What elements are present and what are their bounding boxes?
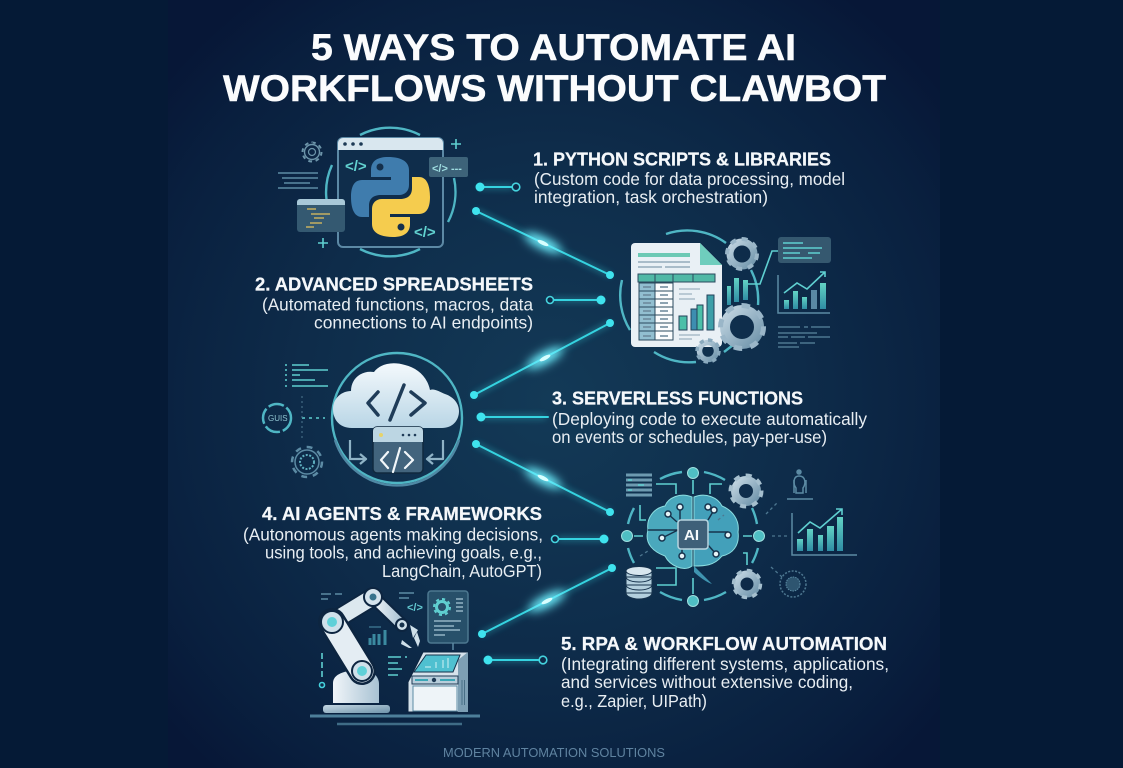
heading block 4: 4. AI AGENTS & FRAMEWORKS [262, 504, 542, 524]
icon: python window [278, 128, 468, 256]
icon: serverless cloud: GUIS [268, 414, 288, 423]
heading block 1 [533, 150, 845, 207]
heading block 1: integration, task orchestration) [534, 187, 768, 207]
heading block 5: 5. RPA & WORKFLOW AUTOMATION [561, 634, 887, 654]
heading block 5 [561, 634, 889, 711]
icon: serverless cloud [263, 353, 462, 485]
icon: AI brain [622, 468, 857, 606]
heading block 1: 1. PYTHON SCRIPTS & LIBRARIES [533, 150, 831, 170]
heading block 5: and services without extensive coding, [561, 672, 853, 692]
title [223, 27, 886, 109]
icon: python window: </> [345, 158, 367, 175]
icon: robot arm and kiosk [310, 588, 480, 724]
heading block 1: (Custom code for data processing, model [534, 169, 845, 189]
footer: MODERN AUTOMATION SOLUTIONS [443, 746, 665, 760]
heading block 2: (Automated functions, macros, data [262, 294, 533, 314]
icon: spreadsheet [620, 230, 831, 362]
heading block 3: on events or schedules, pay-per-use) [552, 427, 827, 447]
heading block 2: 2. ADVANCED SPREADSHEETS [255, 274, 533, 294]
heading block 3: 3. SERVERLESS FUNCTIONS [552, 388, 803, 408]
heading block 4: using tools, and achieving goals, e.g., [265, 542, 542, 562]
heading block 5: e.g., Zapier, UIPath) [561, 691, 707, 711]
heading block 4 [243, 504, 543, 581]
heading block 3: (Deploying code to execute automatically [552, 409, 867, 429]
heading block 5: (Integrating different systems, applications, [561, 654, 889, 674]
connectors [470, 182, 616, 664]
heading block 4: (Autonomous agents making decisions, [243, 524, 543, 544]
icon: python window: </> [414, 224, 436, 241]
icon: robot arm and kiosk: </> [407, 602, 423, 614]
title: WORKFLOWS WITHOUT CLAWBOT [223, 68, 886, 109]
heading block 4: LangChain, AutoGPT) [382, 561, 542, 581]
icon: AI brain: AI [684, 527, 699, 544]
icon: python window: </> --- [432, 163, 462, 175]
heading block 3 [552, 388, 867, 447]
title: 5 WAYS TO AUTOMATE AI [311, 27, 796, 68]
heading block 2: connections to AI endpoints) [314, 312, 533, 332]
heading block 2 [255, 274, 533, 332]
